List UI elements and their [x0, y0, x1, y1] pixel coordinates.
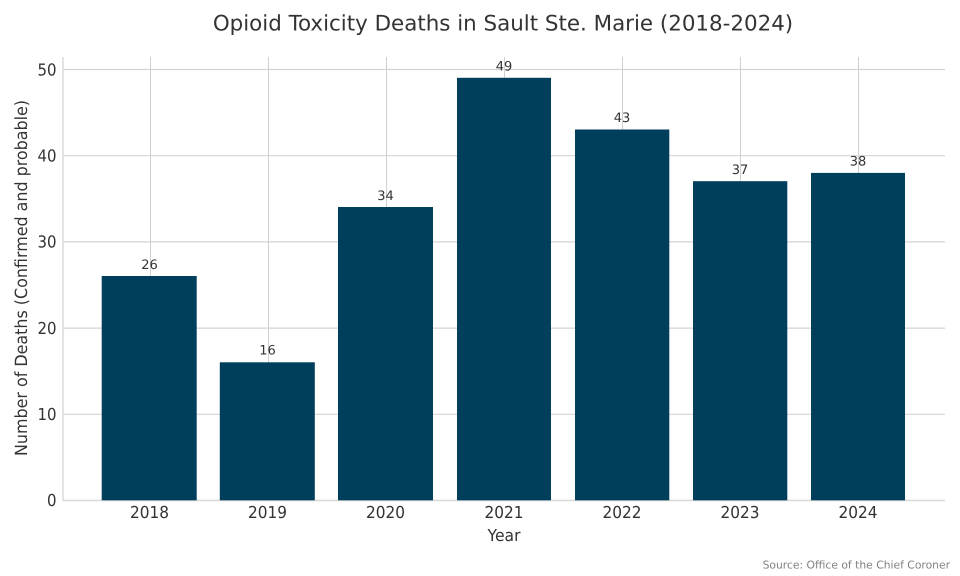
title: Opioid Toxicity Deaths in Sault Ste. Marie (2018-2024)	[213, 12, 793, 36]
bar value labels: 43	[614, 111, 630, 126]
x axis tick labels	[130, 503, 878, 522]
x axis tick labels: 2020	[366, 503, 405, 522]
bar value labels	[141, 60, 866, 358]
y axis title: Number of Deaths (Confirmed and probable)	[11, 100, 31, 456]
source note: Source: Office of the Chief Coroner	[763, 558, 951, 572]
bar value labels: 49	[496, 60, 512, 74]
x axis tick labels: 2024	[838, 503, 878, 522]
y axis tick labels: 50	[38, 60, 56, 80]
bar value labels: 16	[259, 344, 276, 358]
bar value labels: 37	[732, 163, 748, 178]
y axis tick labels: 10	[38, 405, 56, 424]
x axis tick labels: 2018	[130, 503, 169, 522]
bar value labels: 38	[850, 154, 866, 170]
x axis tick labels: 2021	[484, 503, 524, 522]
bar value labels: 26	[141, 258, 158, 273]
bars	[102, 78, 905, 500]
y axis tick labels	[38, 60, 56, 510]
y axis tick labels: 0	[47, 491, 56, 510]
bar value labels: 34	[377, 189, 394, 204]
x axis title: Year	[487, 526, 521, 545]
x axis tick labels: 2023	[720, 503, 760, 522]
y axis tick labels: 20	[38, 319, 56, 338]
x axis tick labels: 2019	[248, 503, 287, 522]
y axis tick labels: 30	[38, 232, 56, 252]
x axis tick labels: 2022	[602, 503, 642, 522]
y axis tick labels: 40	[38, 146, 56, 166]
